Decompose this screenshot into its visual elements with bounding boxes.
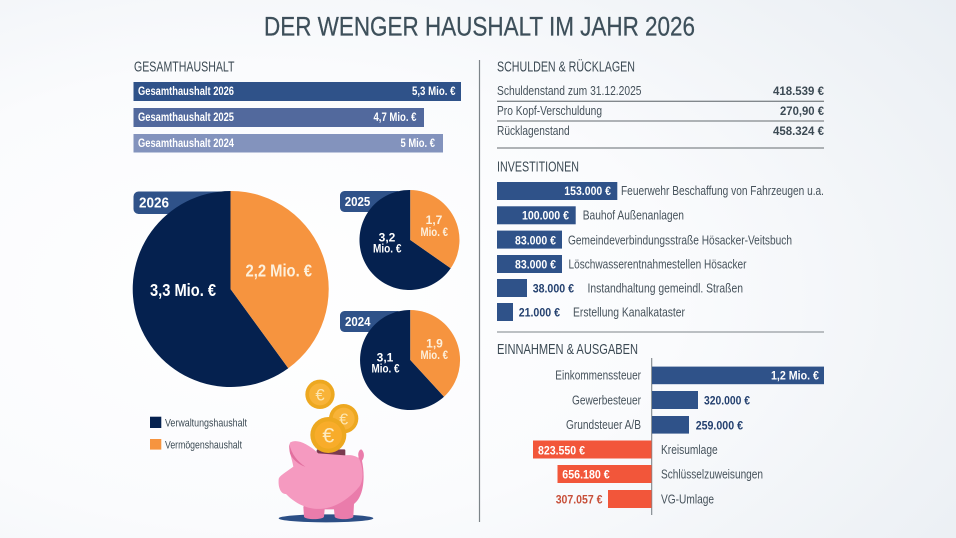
- bar: Schlüsselzuweisungen: [558, 465, 763, 483]
- row: Rücklagenstand: [497, 124, 824, 138]
- bar: Löschwasser: Löschwasserentnahmestellen Hösacker: [568, 257, 746, 271]
- bar: Feuerwehr: 153.000 €: [564, 184, 611, 198]
- pie chart: 2026: 3,3 Mio. €: [150, 280, 216, 300]
- coin: top: €: [315, 385, 325, 404]
- bar: Gesamthaushalt 2025: Gesamthaushalt 2025: [138, 112, 234, 124]
- panel: Gesamthaushalt: [134, 60, 461, 152]
- bar: Gesamthaushalt 2025: 4,7 Mio. €: [374, 112, 417, 124]
- bar: Gesamthaushalt 2024: Gesamthaushalt 2024: [138, 138, 234, 150]
- icon: piggy bank with coins: [279, 380, 373, 522]
- pie chart: 2024: Mio. €: [372, 362, 400, 376]
- row: Pro Kopf: 270,90 €: [780, 104, 824, 118]
- bar: Gesamthaushalt 2025: [134, 108, 424, 127]
- pie chart: 2024: Mio. €: [420, 348, 448, 362]
- pie chart: 2024: 3,1: [377, 350, 394, 364]
- bar: VG-Umlage: 307.057 €: [556, 492, 603, 506]
- bar: Instandhaltung: [497, 279, 743, 297]
- bar: Grundsteuer: [566, 416, 743, 434]
- bar: Instandhaltung: 38.000 €: [533, 281, 574, 295]
- bar: Bauhof: Bauhof Außenanlagen: [583, 208, 684, 222]
- bar: Feuerwehr: Feuerwehr Beschaffung von Fahrzeugen u.a.: [621, 184, 824, 198]
- pie chart: 2024: 1,9: [426, 337, 443, 351]
- bar: Gemeindeverbindungsstraße: 83.000 €: [515, 233, 556, 247]
- bar: Bauhof: 100.000 €: [522, 208, 569, 222]
- pie chart: 2024: 2024: [345, 314, 371, 329]
- heading: Schulden und Rücklagen: SCHULDEN & RÜCKLAGEN: [497, 58, 635, 76]
- bar: Gewerbesteuer: Gewerbesteuer: [572, 393, 641, 407]
- bar: Gemeindeverbindungsstraße: [497, 231, 792, 249]
- row: Pro Kopf: Pro Kopf-Verschuldung: [497, 104, 602, 118]
- bar: Schlüsselzuweisungen: Schlüsselzuweisungen: [661, 467, 763, 481]
- pie chart: 2025: 2025: [345, 194, 370, 209]
- pie chart: 2025: Mio. €: [373, 242, 402, 256]
- bar: Einkommensteuer: Einkommenssteuer: [555, 369, 641, 383]
- year tag 2025: [340, 191, 402, 212]
- row: Schuldenstand: Schuldenstand zum 31.12.2025: [497, 84, 642, 98]
- bar: VG-Umlage: [556, 490, 714, 508]
- bar: Kreisumlage: [533, 440, 718, 458]
- bar: Kreisumlage: 823.550 €: [538, 444, 585, 458]
- heading: Gesamthaushalt: GESAMTHAUSHALT: [134, 60, 235, 76]
- bar: Löschwasser: [497, 255, 746, 273]
- heading: Einnahmen und Ausgaben: EINNAHMEN & AUSGABEN: [497, 342, 638, 358]
- coin: front: [310, 417, 346, 453]
- pie chart: 2024: [340, 310, 460, 410]
- bar: Einkommensteuer: [555, 367, 824, 384]
- coin: front: €: [322, 424, 334, 448]
- bar: Schlüsselzuweisungen: 656.180 €: [562, 468, 610, 482]
- row: Schuldenstand: 418.539 €: [773, 84, 824, 98]
- row: Pro Kopf: [497, 104, 824, 118]
- pie chart: 2025: Mio. €: [420, 225, 448, 239]
- row: Rücklagenstand: 458.324 €: [773, 124, 824, 138]
- bar: Grundsteuer: 259.000 €: [696, 418, 743, 432]
- panel: Investitionen: [497, 159, 824, 321]
- pie chart: 2025: [340, 190, 459, 290]
- bar: VG-Umlage: VG-Umlage: [661, 492, 714, 506]
- bar: Grundsteuer: Grundsteuer A/B: [566, 418, 641, 432]
- pie chart: 2026: 2,2 Mio. €: [246, 261, 312, 281]
- row: Schuldenstand: [497, 84, 824, 98]
- heading: Investitionen: INVESTITIONEN: [497, 159, 579, 175]
- coin: top: [305, 380, 335, 409]
- title: DER WENGER HAUSHALT IM JAHR 2026: [264, 12, 695, 42]
- bar: Gewerbesteuer: [572, 391, 750, 409]
- bar: Gesamthaushalt 2026: Gesamthaushalt 2026: [138, 86, 234, 98]
- panel: Einnahmen und Ausgaben: [497, 342, 824, 515]
- legend: Verwaltungshaushalt: [165, 418, 247, 430]
- bar: Kanalkataster: 21.000 €: [519, 305, 560, 319]
- year tag 2026: [134, 192, 226, 214]
- panel: Schulden und Rücklagen: [497, 58, 824, 148]
- year tag 2024: [340, 311, 402, 332]
- bar: Gewerbesteuer: 320.000 €: [704, 394, 750, 408]
- bar: Kreisumlage: Kreisumlage: [661, 443, 718, 457]
- bar: Instandhaltung: Instandhaltung gemeindl. Straßen: [588, 282, 743, 296]
- bar: Gesamthaushalt 2026: 5,3 Mio. €: [412, 86, 456, 98]
- coin: back: €: [339, 412, 348, 429]
- pie chart: 2025: 3,2: [379, 230, 396, 244]
- legend: Vermögenshaushalt: [165, 440, 242, 452]
- bar: Einkommensteuer: 1,2 Mio. €: [771, 368, 819, 382]
- bar: Kanalkataster: Erstellung Kanalkataster: [573, 306, 685, 320]
- bar: Löschwasser: 83.000 €: [515, 257, 556, 271]
- coin: back: [329, 404, 358, 433]
- bar: Gesamthaushalt 2024: [134, 134, 443, 152]
- bar: Feuerwehr: [497, 182, 824, 200]
- bar: Gesamthaushalt 2024: 5 Mio. €: [400, 138, 435, 150]
- row: Rücklagenstand: Rücklagenstand: [497, 124, 570, 138]
- pie chart: 2026: [133, 191, 329, 387]
- bar: Gemeindeverbindungsstraße: Gemeindeverbindungsstraße Hösacker-Veitsbuch: [568, 233, 792, 247]
- pie chart: 2025: 1,7: [426, 213, 443, 227]
- bar: Gesamthaushalt 2026: [134, 82, 461, 101]
- bar: Bauhof: [497, 206, 684, 224]
- legend: [150, 417, 247, 452]
- pie chart: 2026: 2026: [139, 194, 169, 211]
- bar: Kanalkataster: [497, 303, 685, 321]
